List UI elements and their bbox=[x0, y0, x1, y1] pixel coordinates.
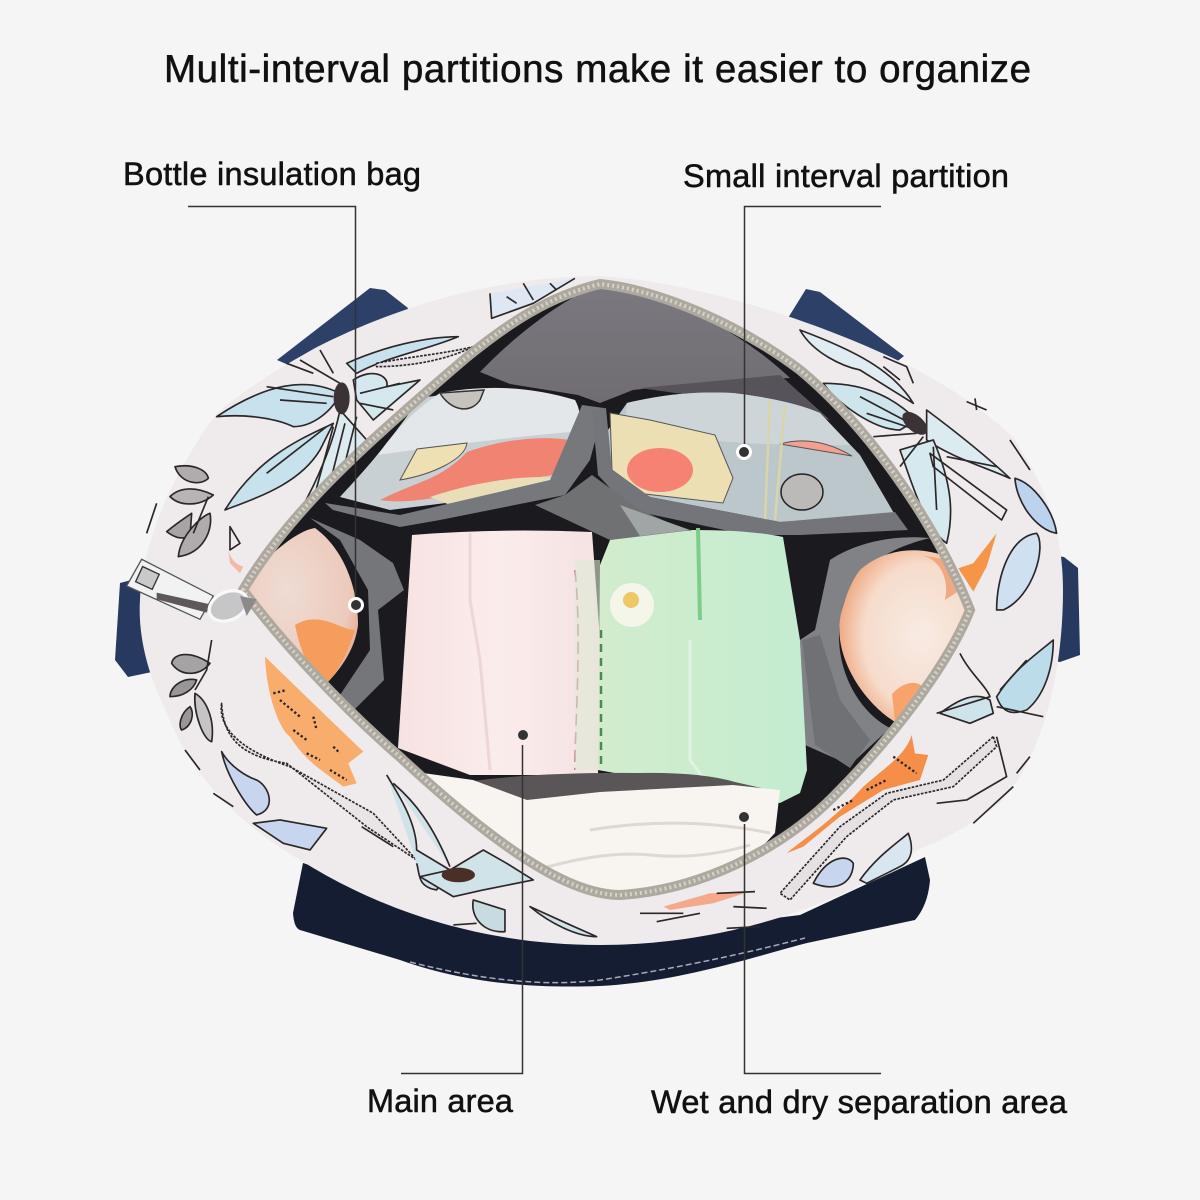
right top handle bbox=[788, 289, 904, 375]
left bottle holder bbox=[310, 518, 404, 712]
title: Multi-interval partitions make it easier to organize bbox=[164, 48, 1031, 91]
back lining bbox=[480, 285, 790, 403]
zipper edge bbox=[243, 284, 970, 895]
print: lower right bbox=[640, 640, 1053, 928]
callout: Small interval partition bbox=[683, 158, 1009, 460]
print: upper right bbox=[800, 330, 1057, 610]
bottom strap bbox=[293, 857, 930, 987]
bottom strap stitching bbox=[410, 938, 805, 983]
left side strap bbox=[115, 575, 152, 677]
small partition left pocket bbox=[325, 405, 604, 527]
main area pink pack bbox=[398, 531, 600, 775]
bag illustration bbox=[115, 260, 1080, 987]
callout: Main area: Main area bbox=[367, 1083, 514, 1119]
callout: Bottle insulation bag bbox=[123, 156, 421, 613]
small partition right diaper bbox=[608, 392, 895, 522]
callout: Wet and dry separation area bbox=[651, 812, 1068, 1120]
print: upper left bbox=[147, 278, 580, 573]
wet and dry area bbox=[425, 772, 780, 890]
main area green pack bbox=[598, 528, 807, 803]
callout: Bottle insulation bag: Bottle insulation bag bbox=[123, 156, 421, 192]
left bottle bbox=[240, 528, 358, 685]
callout: Main area bbox=[367, 730, 528, 1119]
bag outer shell bbox=[140, 276, 1063, 945]
small partition right pocket bbox=[592, 408, 908, 535]
right bottle holder and mesh bbox=[800, 537, 930, 768]
print: lower left bbox=[170, 640, 597, 937]
callout: Small interval partition: Small interval partition bbox=[683, 158, 1009, 194]
interior cavity bbox=[249, 289, 964, 890]
small partition left diaper bbox=[340, 388, 580, 510]
right bottle bbox=[839, 550, 975, 722]
callout: Wet and dry separation area: Wet and dry separation area bbox=[651, 1084, 1068, 1120]
right side strap bbox=[1048, 555, 1080, 662]
left top handle bbox=[277, 288, 408, 370]
zipper pull bbox=[127, 559, 257, 627]
